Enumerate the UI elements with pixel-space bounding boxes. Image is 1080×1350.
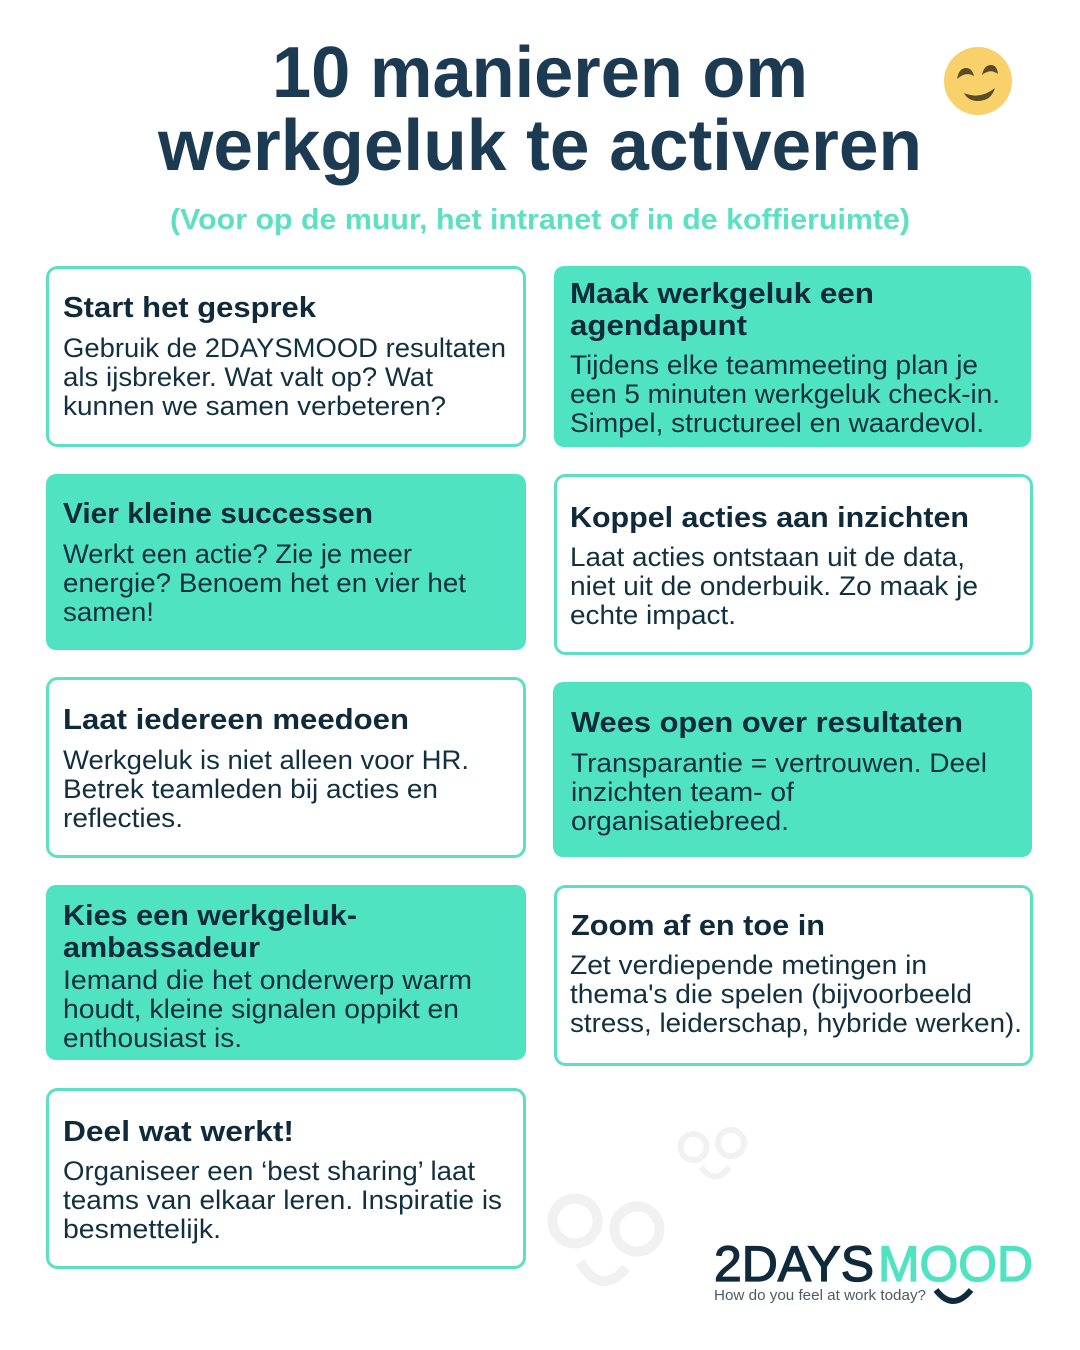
panel: Maak werkgeluk een agendapunt: Tijdens elke teammeeting plan je <box>570 350 978 380</box>
panel: Koppel acties aan inzichten: echte impact. <box>570 600 736 630</box>
subtitle: (Voor op de muur, het intranet of in de koffieruimte) <box>170 204 910 236</box>
icon: small faint smiley <box>680 1130 744 1176</box>
panel: Maak werkgeluk een agendapunt: een 5 minuten werkgeluk check-in. <box>570 379 1000 409</box>
panel: Kies een werkgeluk-ambassadeur: Kies een werkgeluk- <box>63 900 357 932</box>
logo: 2DAYSMOOD: MOOD <box>878 1236 1033 1292</box>
title: werkgeluk te activeren <box>157 106 922 186</box>
panel: Vier kleine successen: samen! <box>63 597 154 627</box>
panel: Wees open over resultaten: organisatiebreed. <box>571 806 789 836</box>
panel: Koppel acties aan inzichten: niet uit de onderbuik. Zo maak je <box>570 571 978 601</box>
panel: Zoom af en toe in <box>556 886 1032 1064</box>
logo: 2DAYSMOOD: 2DAYS <box>714 1236 874 1292</box>
panel: Zoom af en toe in: thema's die spelen (bijvoorbeeld <box>570 979 972 1009</box>
icon: smiling emoji <box>944 47 1012 115</box>
panel: Koppel acties aan inzichten: Laat acties ontstaan uit de data, <box>570 542 965 572</box>
panel: Zoom af en toe in: Zoom af en toe in <box>571 910 825 942</box>
panel: Deel wat werkt!: Organiseer een ‘best sharing’ laat <box>63 1156 476 1186</box>
title <box>157 33 922 186</box>
panel: Vier kleine successen: Werkt een actie? Zie je meer <box>63 539 412 569</box>
panel: Wees open over resultaten: inzichten team- of <box>571 777 795 807</box>
panel: Wees open over resultaten: Transparantie = vertrouwen. Deel <box>571 748 987 778</box>
panel: Kies een werkgeluk-ambassadeur: Iemand die het onderwerp warm <box>63 965 472 995</box>
panel: Laat iedereen meedoen: Betrek teamleden bij acties en <box>63 774 438 804</box>
panel: Deel wat werkt!: Deel wat werkt! <box>63 1116 294 1148</box>
panel: Maak werkgeluk een agendapunt: Simpel, structureel en waardevol. <box>570 408 984 438</box>
panel: Start het gesprek: Gebruik de 2DAYSMOOD resultaten <box>63 333 506 363</box>
panel: Maak werkgeluk een agendapunt: agendapunt <box>570 310 747 342</box>
panel: Start het gesprek <box>48 268 524 446</box>
logo: 2DAYSMOOD <box>714 1236 1033 1304</box>
panel: Wees open over resultaten <box>553 682 1032 857</box>
panel: Maak werkgeluk een agendapunt: Maak werkgeluk een <box>570 278 874 310</box>
panel: Kies een werkgeluk-ambassadeur: houdt, kleine signalen oppikt en <box>63 994 459 1024</box>
panel: Start het gesprek: Start het gesprek <box>63 292 317 324</box>
panel: Laat iedereen meedoen <box>48 678 524 856</box>
panel: Maak werkgeluk een agendapunt <box>554 266 1031 447</box>
panel: Deel wat werkt!: teams van elkaar leren. Inspiratie is <box>63 1185 502 1215</box>
panel: Start het gesprek: kunnen we samen verbeteren? <box>63 391 446 421</box>
logo: 2DAYSMOOD: How do you feel at work today? <box>714 1287 926 1304</box>
panel: Zoom af en toe in: Zet verdiepende metingen in <box>570 950 927 980</box>
icon: large faint smiley <box>552 1198 660 1281</box>
panel: Start het gesprek: als ijsbreker. Wat valt op? Wat <box>63 362 434 392</box>
panel: Zoom af en toe in: stress, leiderschap, hybride werken). <box>570 1008 1022 1038</box>
panel: Laat iedereen meedoen: Werkgeluk is niet alleen voor HR. <box>63 745 469 775</box>
title: 10 manieren om <box>272 33 808 113</box>
panel: Laat iedereen meedoen: reflecties. <box>63 803 183 833</box>
panel: Kies een werkgeluk-ambassadeur: enthousiast is. <box>63 1023 242 1053</box>
panel: Wees open over resultaten: Wees open over resultaten <box>571 707 963 739</box>
panel: Vier kleine successen: energie? Benoem het en vier het <box>63 568 467 598</box>
panel: Vier kleine successen <box>46 474 526 650</box>
panel: Deel wat werkt!: besmettelijk. <box>63 1214 221 1244</box>
panel: Koppel acties aan inzichten <box>556 476 1032 654</box>
panel: Vier kleine successen: Vier kleine successen <box>63 498 373 530</box>
panel: Kies een werkgeluk-ambassadeur <box>46 885 526 1060</box>
panel: Koppel acties aan inzichten: Koppel acties aan inzichten <box>570 502 969 534</box>
panel: Kies een werkgeluk-ambassadeur: ambassadeur <box>63 932 260 964</box>
panel: Deel wat werkt! <box>48 1090 524 1268</box>
panel: Laat iedereen meedoen: Laat iedereen meedoen <box>63 704 409 736</box>
